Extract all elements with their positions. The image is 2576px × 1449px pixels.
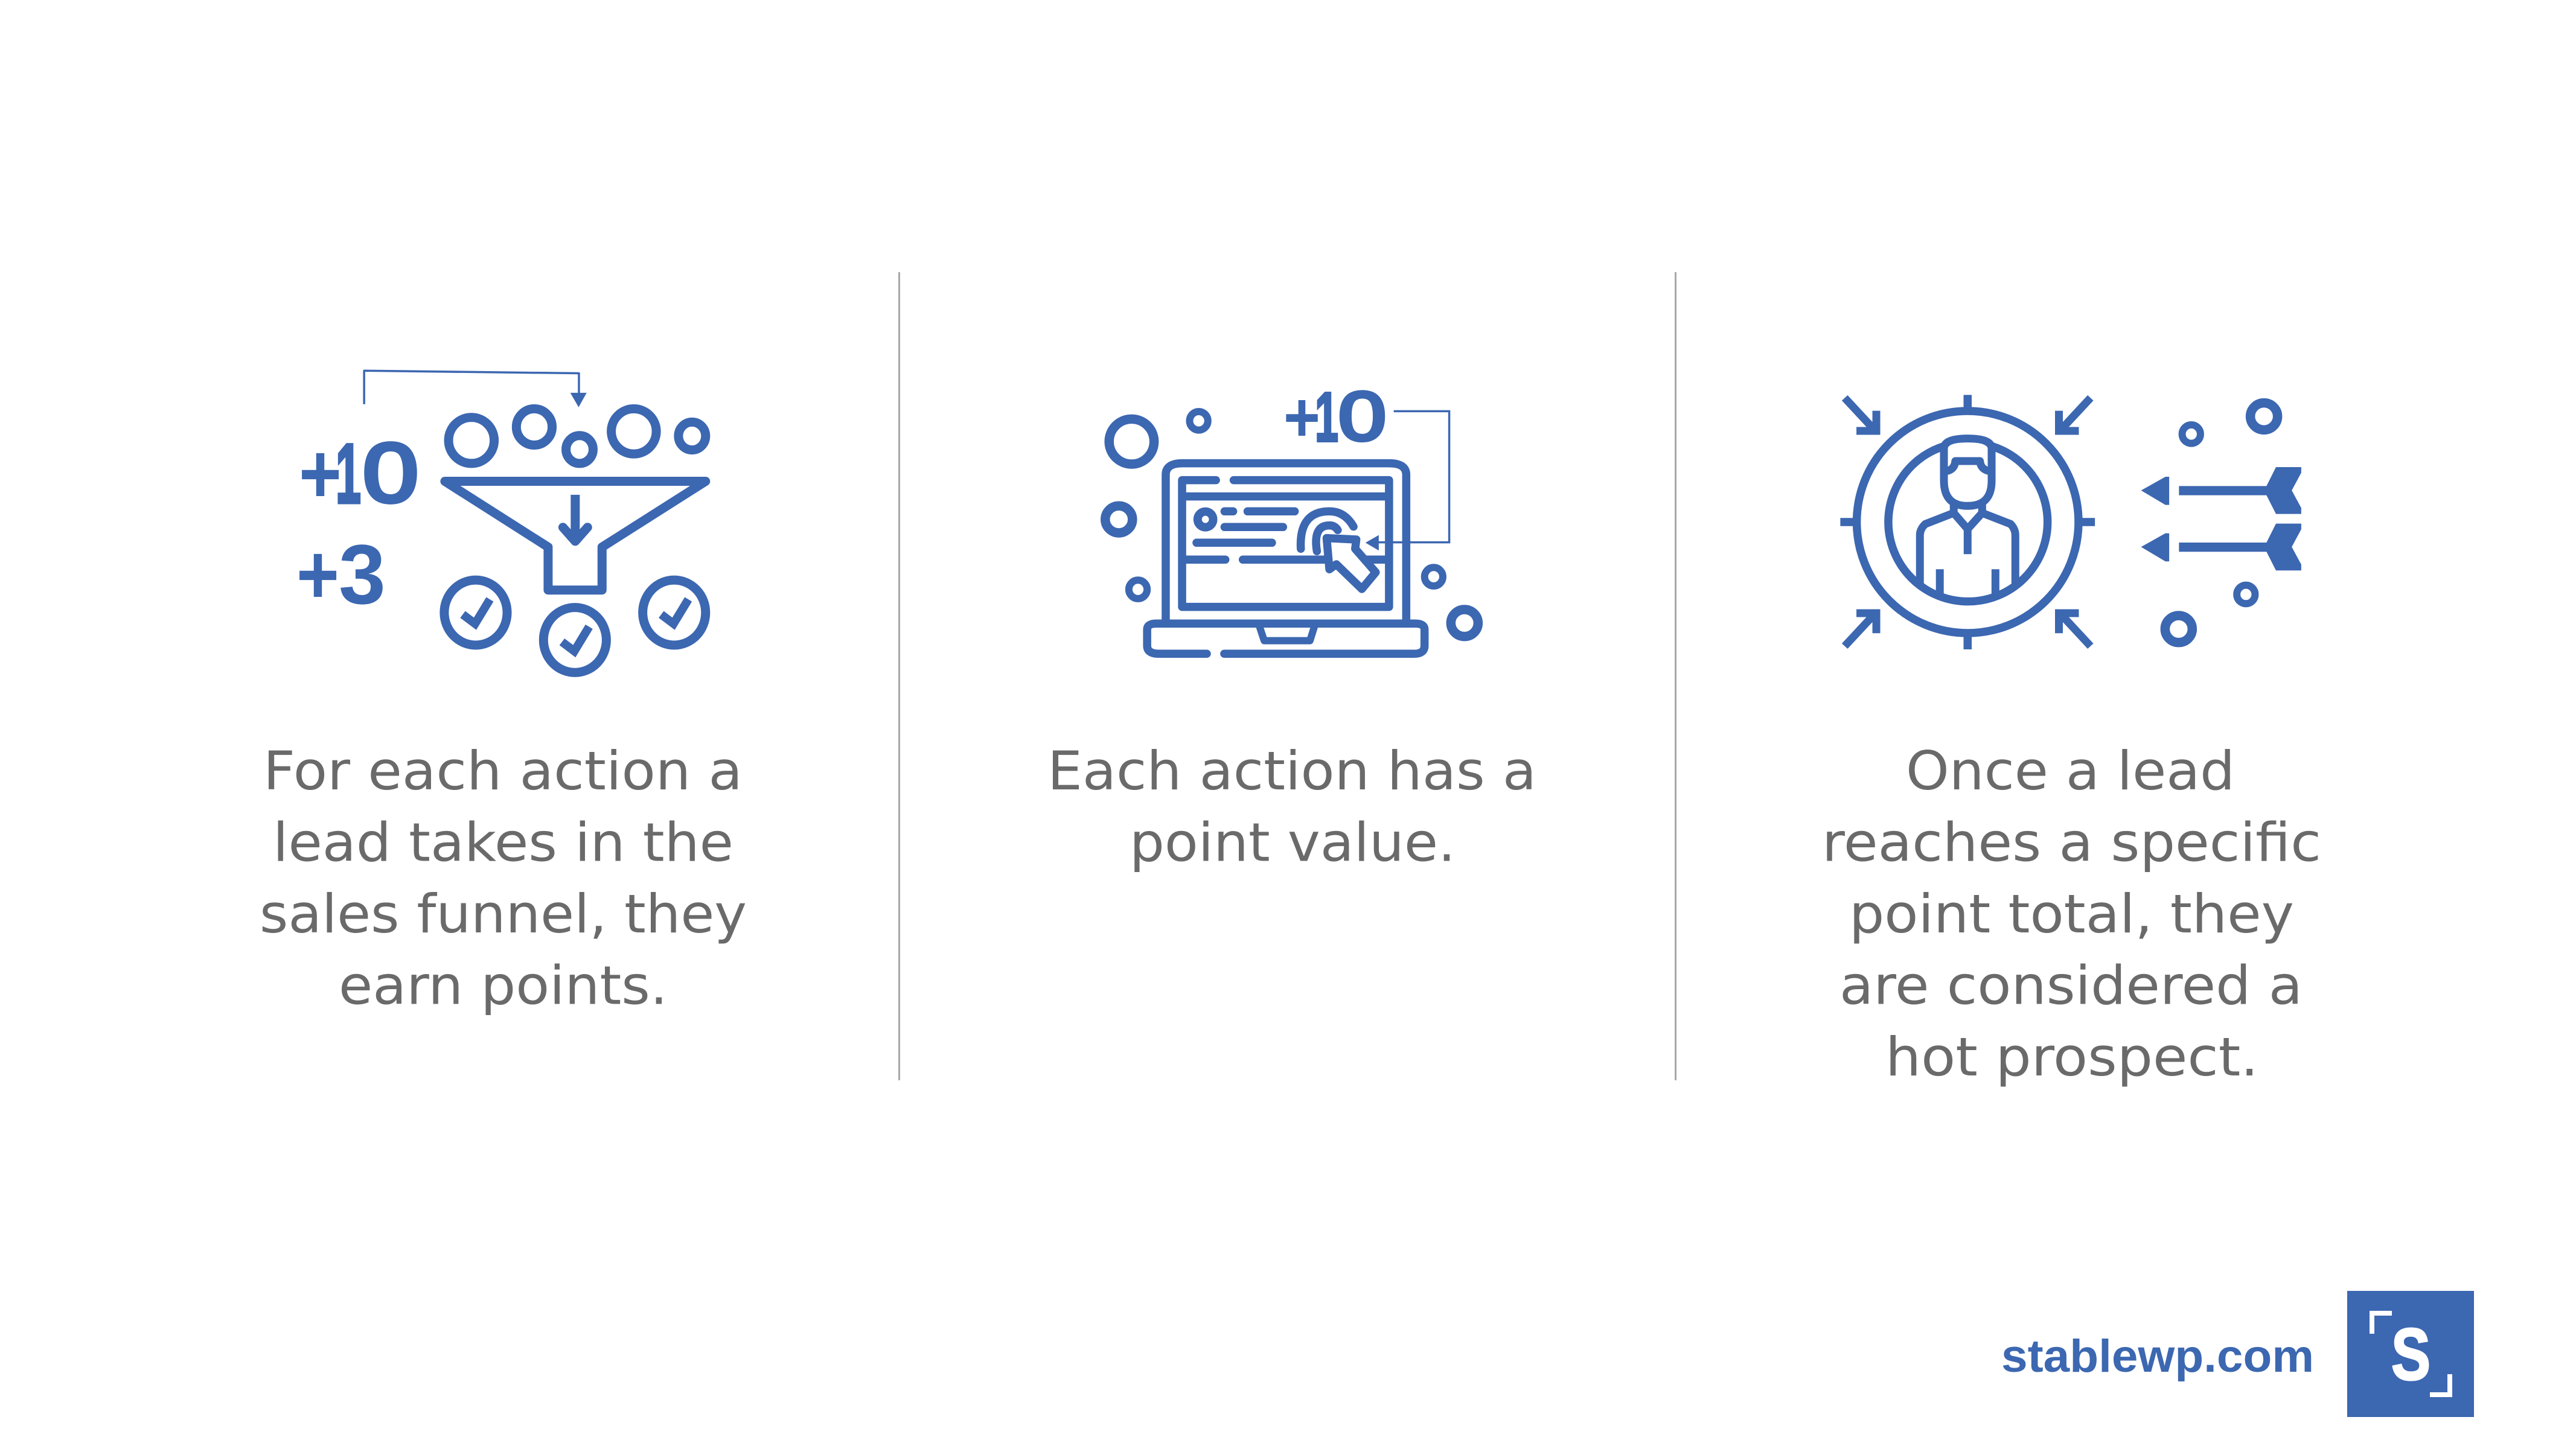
divider: left (898, 272, 900, 1080)
text block: funnel description: earn points. (339, 955, 668, 1016)
logo badge: S (2391, 1313, 2431, 1395)
text block: hot prospect description: point total, they (1849, 883, 2294, 945)
brand footer (2001, 1291, 2474, 1417)
text block: funnel description: lead takes in the (273, 811, 733, 874)
score label +10: 0 (1338, 378, 1386, 455)
text block: point value description: Each action has a (1047, 740, 1536, 802)
score label +10: + (1283, 378, 1320, 456)
text block: hot prospect description (1822, 740, 2321, 1088)
score labels +10 and +3: 1 (336, 426, 361, 521)
text block: point value description (1047, 740, 1536, 874)
text block: point value description: point value. (1130, 811, 1456, 874)
panel: point value (1047, 378, 1536, 874)
text block: hot prospect description: Once a lead (1906, 740, 2235, 802)
icon: sales funnel with leads (364, 371, 706, 672)
score labels +10 and +3: 3 (339, 527, 386, 622)
panel: funnel points (260, 371, 747, 1017)
brand url: stablewp.com (2001, 1331, 2314, 1382)
text block: funnel description: For each action a (263, 740, 743, 802)
score labels +10 and +3 (296, 426, 418, 622)
score labels +10 and +3: + (296, 527, 339, 622)
text block: funnel description: sales funnel, they (260, 883, 747, 945)
logo badge (2347, 1291, 2474, 1417)
text block: hot prospect description: hot prospect. (1885, 1026, 2258, 1088)
score labels +10 and +3: + (299, 426, 342, 521)
score label +10: 1 (1315, 378, 1338, 456)
score labels +10 and +3: 0 (363, 427, 418, 520)
text block: hot prospect description: are considered a (1839, 955, 2303, 1016)
panel: hot prospect (1822, 395, 2321, 1088)
text block: funnel description (260, 740, 747, 1016)
score label +10 (1283, 378, 1386, 456)
text block: hot prospect description: reaches a specific (1822, 811, 2321, 874)
icon: target person with darts (1840, 395, 2301, 649)
divider: right (1675, 272, 1676, 1080)
icon: laptop with clicking cursor (1105, 411, 1478, 654)
